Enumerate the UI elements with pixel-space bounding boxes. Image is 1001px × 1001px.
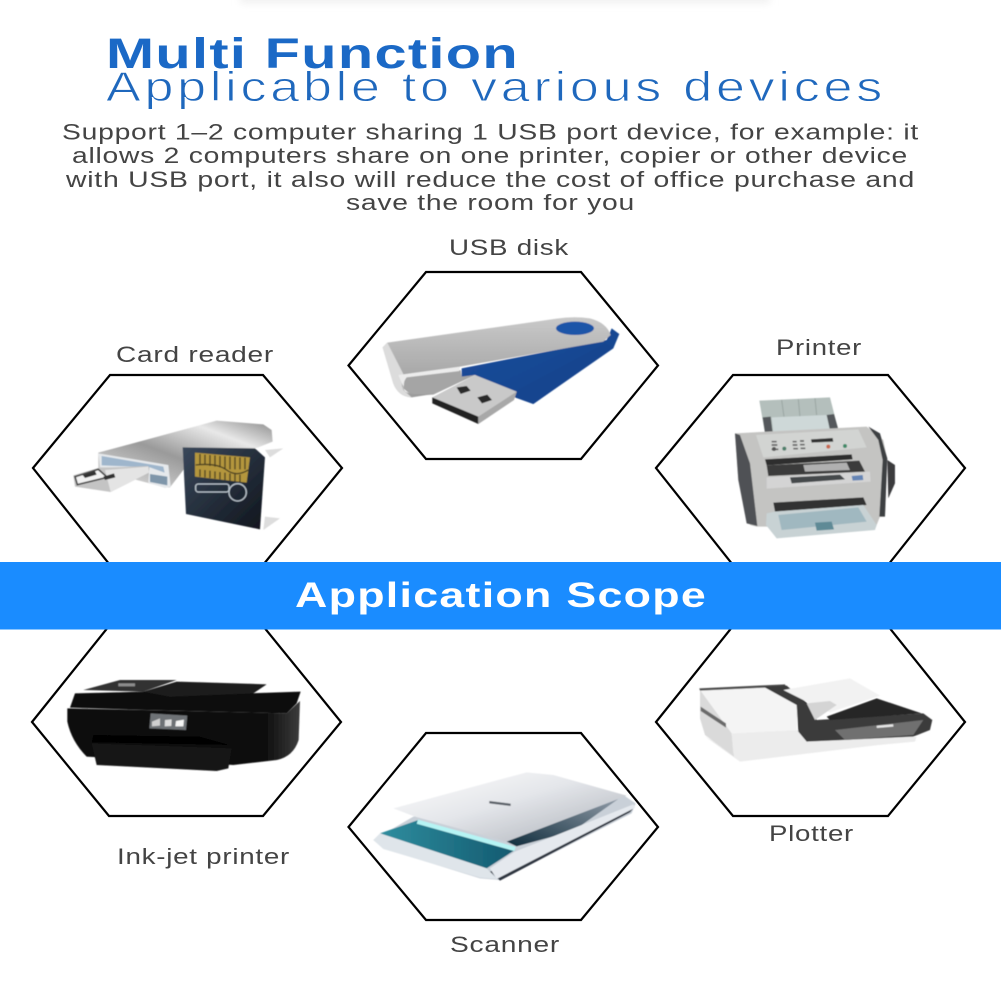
subheading: Applicable to various devices (106, 63, 886, 110)
description text (62, 120, 919, 215)
label: Card reader: Card reader (116, 342, 274, 367)
description text: allows 2 computers share on one printer, copier or other device (72, 143, 908, 168)
label: USB disk: USB disk (449, 235, 569, 260)
description text: Support 1–2 computer sharing 1 USB port device, for example: it (62, 120, 919, 144)
icon: plotter (699, 678, 932, 762)
icon: multifunction printer (735, 397, 895, 538)
label: Plotter: Plotter (769, 821, 854, 846)
hexagon outline (348, 272, 658, 459)
panel: Printer (656, 335, 965, 565)
hexagon outline (656, 626, 965, 816)
top edge shadow (240, 0, 770, 3)
label: Scanner: Scanner (450, 932, 560, 957)
icon: USB flash drive (383, 317, 619, 424)
panel: Plotter (656, 626, 965, 846)
panel: Card reader (33, 342, 342, 565)
banner background (0, 562, 1001, 630)
description text: save the room for you (346, 190, 635, 215)
hexagon outline (348, 733, 658, 920)
hexagon outline (32, 626, 341, 816)
banner: Application Scope (0, 562, 1001, 630)
label: Ink-jet printer: Ink-jet printer (117, 844, 290, 869)
panel: Ink-jet printer (32, 626, 341, 869)
description text: with USB port, it also will reduce the cost of office purchase and (65, 167, 915, 192)
panel: USB disk (348, 235, 658, 459)
icon: flatbed scanner (373, 772, 636, 881)
hexagon outline (33, 375, 342, 565)
icon: USB card reader with memory card (73, 421, 283, 530)
panel: Scanner (348, 733, 658, 957)
title block (106, 30, 886, 110)
banner heading: Application Scope (295, 576, 707, 615)
label: Printer: Printer (776, 335, 862, 360)
icon: ink-jet printer (67, 680, 301, 771)
hexagon outline (656, 375, 965, 565)
heading: Multi Function: Multi Function (106, 30, 519, 78)
